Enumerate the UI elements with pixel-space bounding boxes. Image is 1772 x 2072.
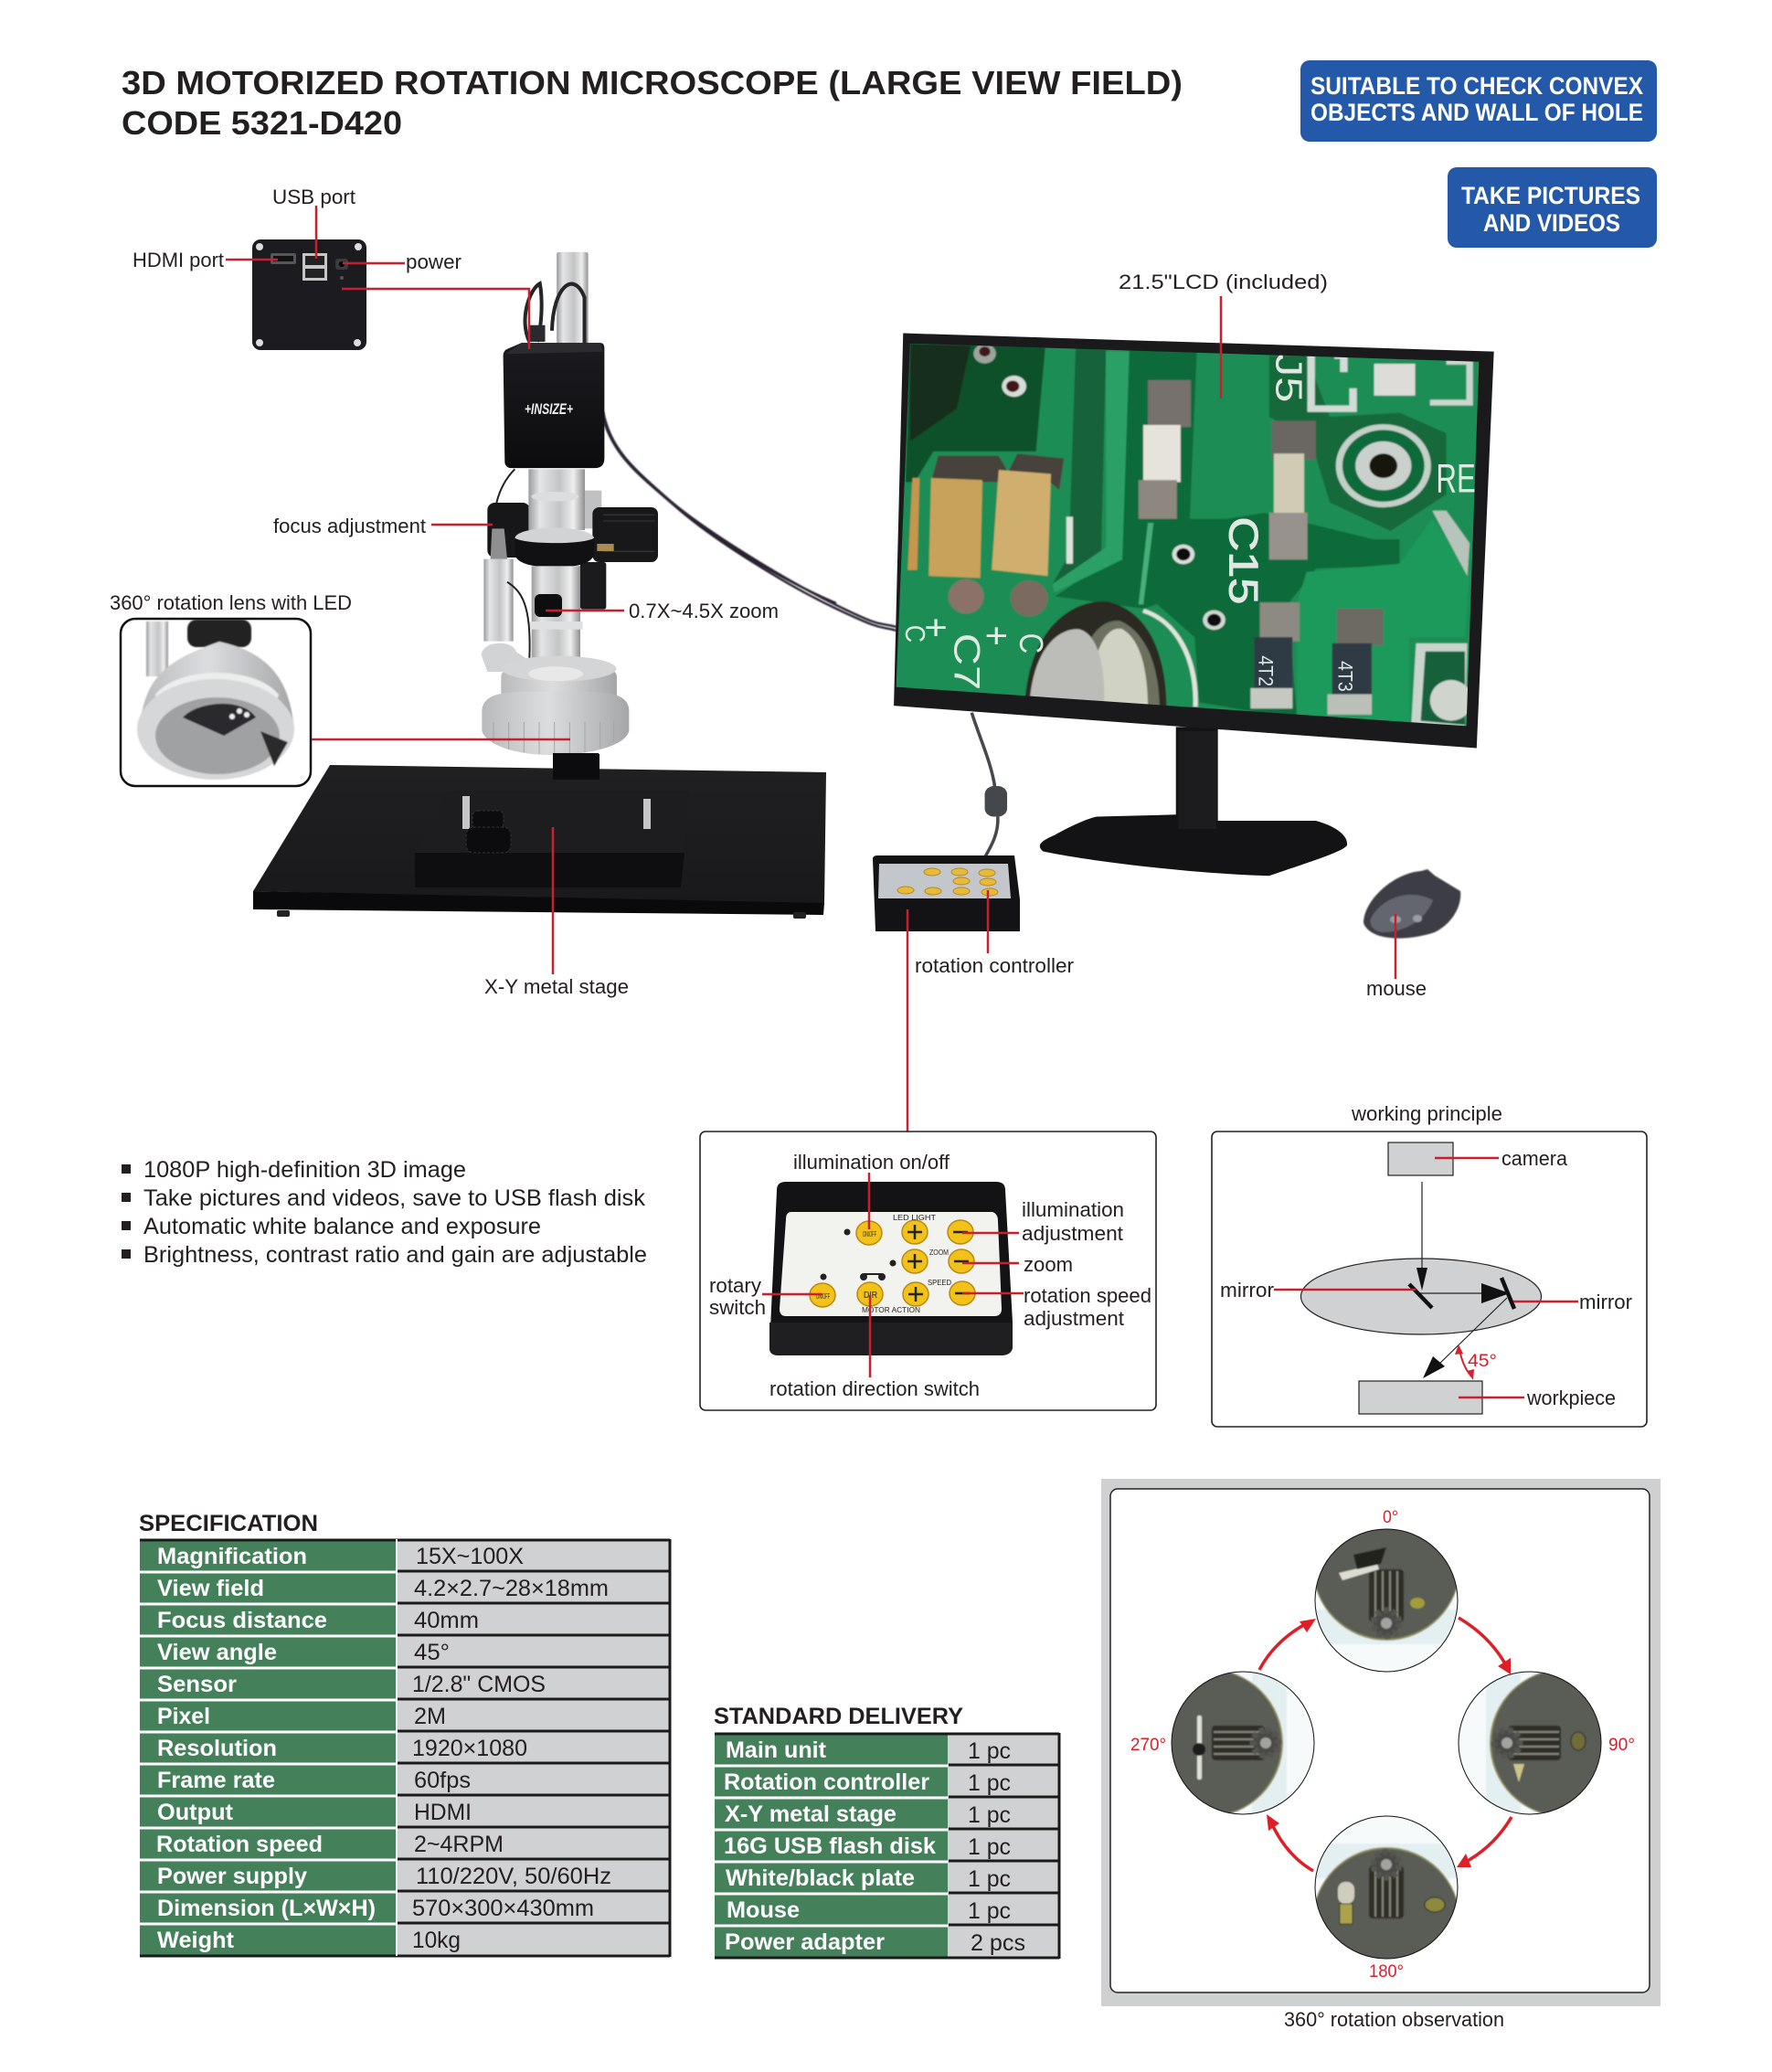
standard delivery table: 1 pc	[968, 1738, 1011, 1764]
PCB silkscreen markings: +	[924, 608, 948, 647]
label: power	[343, 250, 462, 273]
callout: right mirror: mirror	[1579, 1291, 1632, 1313]
mirrors	[1409, 1278, 1514, 1309]
controller box: SPEED	[928, 1279, 951, 1287]
specification table: Pixel	[157, 1704, 210, 1729]
panel: 360 rotation observation	[1101, 1479, 1661, 2006]
specification table	[140, 1539, 670, 1957]
electrolytic capacitor	[1143, 611, 1195, 707]
PCB silkscreen markings: 4T2	[1254, 655, 1277, 686]
specification table: 110/220V, 50/60Hz	[416, 1864, 611, 1889]
camera body	[504, 343, 604, 468]
callout: rotary switch	[709, 1274, 822, 1319]
callout: rotation direction switch: rotation direction switch	[769, 1377, 980, 1400]
label: zoom: 0.7X~4.5X zoom	[629, 600, 779, 622]
mounting ring	[1339, 427, 1427, 505]
view: 180 degrees	[1314, 1815, 1459, 1960]
label: rotation controller: rotation controller	[915, 954, 1074, 977]
specification table: HDMI	[414, 1800, 472, 1825]
cables camera to monitor	[603, 411, 897, 631]
camera brand label: +INSIZE+	[525, 400, 573, 418]
specification table: Focus distance	[157, 1608, 327, 1633]
callout: zoom	[962, 1253, 1073, 1276]
label: working principle: working principle	[1351, 1102, 1502, 1125]
standard delivery table: Power adapter	[725, 1929, 885, 1955]
focus knobs	[580, 491, 601, 528]
specification table: Resolution	[157, 1736, 277, 1761]
specification table: 60fps	[414, 1768, 471, 1793]
standard delivery table: 1 pc	[968, 1802, 1011, 1828]
standard delivery table: 1 pc	[968, 1834, 1011, 1860]
workpiece: workpiece	[1526, 1387, 1616, 1409]
standard delivery table: Main unit	[726, 1737, 827, 1763]
label: LCD: 21.5"LCD (included)	[1119, 271, 1328, 293]
view: 0 degrees	[1314, 1528, 1459, 1673]
label: X-Y metal stage: X-Y metal stage	[484, 975, 629, 998]
view: 90 degrees	[1459, 1671, 1601, 1815]
view: 270 degrees	[1172, 1671, 1314, 1815]
title: CODE 5321-D420	[122, 104, 402, 142]
callout: illumination adjustment: adjustment	[1022, 1222, 1123, 1245]
callout: right mirror	[1513, 1291, 1632, 1313]
rotation arrows	[1259, 1618, 1512, 1871]
connector leader line	[342, 289, 529, 349]
label: USB port: USB port	[272, 186, 355, 208]
callout: illumination on/off: illumination on/off	[793, 1151, 950, 1174]
PCB silkscreen markings: RE	[1436, 457, 1476, 502]
specification table: 45°	[414, 1640, 450, 1665]
callout: rotation speed adjustment	[962, 1284, 1151, 1330]
light path arrows	[1417, 1182, 1510, 1378]
specification table: Weight	[157, 1928, 235, 1953]
panel: controller detail	[700, 1132, 1156, 1410]
feature list: Take pictures and videos, save to USB flash disk	[143, 1185, 645, 1211]
inset: rotation lens	[121, 619, 311, 786]
resistors	[1260, 602, 1300, 642]
camera rear panel photo	[252, 239, 366, 350]
label: mouse	[1366, 914, 1427, 1000]
title	[122, 64, 1183, 142]
PCB silkscreen markings: C	[1012, 633, 1048, 653]
label: power: power	[406, 250, 462, 273]
leader: lens	[312, 738, 570, 740]
microscope head	[504, 252, 604, 468]
PCB silkscreen markings: J5	[1268, 354, 1310, 402]
standard delivery table: Mouse	[727, 1897, 800, 1923]
controller box: ON/OFF	[863, 1230, 876, 1238]
monitor bezel	[894, 334, 1494, 749]
specification table: Magnification	[157, 1544, 307, 1569]
angle labels	[1130, 1508, 1635, 1982]
feature list: Brightness, contrast ratio and gain are adjustable	[143, 1242, 647, 1268]
capacitors	[931, 453, 1064, 490]
monitor	[886, 334, 1494, 876]
badge: take pictures and videos	[1448, 167, 1657, 248]
specification table: Sensor	[157, 1672, 237, 1697]
specification table: View angle	[157, 1640, 277, 1665]
leader: controller to detail panel	[907, 909, 908, 1132]
objective	[553, 753, 599, 780]
zoom tube	[532, 566, 580, 669]
label: focus adjustment: focus adjustment	[273, 515, 426, 537]
specification heading: SPECIFICATION	[139, 1511, 318, 1536]
controller box: ON/OFF	[816, 1292, 830, 1301]
standard delivery table: 16G USB flash disk	[724, 1833, 936, 1859]
specification table: 2~4RPM	[414, 1832, 504, 1857]
specification table: Output	[157, 1800, 234, 1825]
callout: rotation speed adjustment: rotation speed	[1024, 1284, 1151, 1307]
standard delivery table: 1 pc	[968, 1898, 1011, 1924]
badge: take pictures and videos: TAKE PICTURES	[1461, 182, 1640, 209]
controller cable	[971, 713, 998, 857]
upper tube	[528, 469, 585, 530]
standard delivery table: X-Y metal stage	[725, 1801, 897, 1827]
angle labels: 270°	[1130, 1736, 1166, 1755]
PCB silkscreen markings: C	[898, 625, 929, 643]
lens ring	[501, 660, 617, 707]
lens ellipse	[1301, 1259, 1541, 1334]
callout: illumination adjustment: illumination	[1022, 1198, 1124, 1221]
specification table: 15X~100X	[416, 1544, 524, 1569]
side cylinder	[483, 559, 514, 642]
PCB silkscreen markings: +	[985, 616, 1008, 655]
specification table: 10kg	[412, 1928, 461, 1953]
specification table: 4.2×2.7~28×18mm	[414, 1576, 609, 1601]
standard delivery heading: STANDARD DELIVERY	[714, 1704, 963, 1729]
PCB silkscreen markings: 4T3	[1333, 661, 1355, 692]
standard delivery table: White/black plate	[726, 1865, 915, 1891]
standard delivery table: 1 pc	[968, 1770, 1011, 1796]
angle labels: 90°	[1608, 1736, 1635, 1755]
callout: rotary switch: rotary	[709, 1274, 761, 1297]
controller box: LED LIGHT	[893, 1214, 936, 1222]
feature list: Automatic white balance and exposure	[143, 1214, 541, 1239]
arrow heads	[1267, 1619, 1511, 1867]
specification table: 1/2.8" CMOS	[412, 1672, 546, 1697]
objective overlap on stage	[553, 754, 600, 780]
badge: suitable to check convex objects: OBJECTS AND WALL OF HOLE	[1310, 99, 1643, 126]
badge: suitable to check convex objects	[1300, 60, 1657, 142]
specification table: 1920×1080	[412, 1736, 527, 1761]
controller box: MOTOR ACTION	[862, 1306, 920, 1314]
45 degree angle: 45°	[1468, 1352, 1497, 1371]
callout: illumination adjustment	[962, 1198, 1124, 1245]
controller box: ZOOM	[929, 1249, 949, 1257]
vias	[1002, 376, 1026, 397]
workpiece	[1359, 1381, 1616, 1414]
panel: working principle diagram	[1212, 1132, 1647, 1427]
badge: take pictures and videos: AND VIDEOS	[1483, 209, 1620, 237]
pillar	[557, 252, 589, 349]
standard delivery table: 2 pcs	[971, 1930, 1025, 1956]
standard delivery table	[715, 1733, 1059, 1959]
collar	[515, 537, 594, 568]
controller box	[769, 1182, 1013, 1355]
specification table: 570×300×430mm	[412, 1896, 594, 1921]
specification table: Rotation speed	[156, 1832, 323, 1857]
X-Y metal stage photo	[253, 765, 826, 919]
feature list	[122, 1157, 647, 1268]
feature list: 1080P high-definition 3D image	[143, 1157, 466, 1183]
angle labels: 180°	[1369, 1962, 1404, 1982]
PCB image on screen	[886, 335, 1493, 735]
standard delivery table: Rotation controller	[724, 1769, 929, 1795]
angle labels: 0°	[1383, 1508, 1398, 1527]
specification table: Frame rate	[157, 1768, 275, 1793]
callout: rotation speed adjustment: adjustment	[1024, 1307, 1124, 1330]
specification table: Power supply	[157, 1864, 307, 1889]
title: 3D MOTORIZED ROTATION MICROSCOPE (LARGE VIEW FIELD)	[122, 64, 1183, 101]
callout: left mirror: mirror	[1220, 1279, 1274, 1302]
camera block	[1388, 1142, 1568, 1175]
microscope body	[482, 469, 658, 780]
specification table: Dimension (L×W×H)	[157, 1896, 376, 1921]
PCB silkscreen markings: C15	[1221, 516, 1267, 604]
top right pads	[1374, 364, 1415, 396]
badge: suitable to check convex objects: SUITABLE TO CHECK CONVEX	[1310, 72, 1643, 100]
specification table: 2M	[414, 1704, 446, 1729]
label: USB port	[272, 186, 355, 259]
label: mouse: mouse	[1366, 977, 1427, 1000]
PCB silkscreen markings	[898, 354, 1476, 692]
monitor stand	[1040, 727, 1347, 876]
45 degree angle	[1455, 1344, 1497, 1380]
PCB silkscreen markings: C7	[947, 633, 988, 690]
rotation controller photo	[873, 855, 1020, 931]
callout: zoom: zoom	[1024, 1253, 1073, 1276]
camera cables	[525, 283, 585, 347]
callout: rotary switch: switch	[709, 1296, 766, 1319]
caption: rotation observation: 360° rotation observation	[1284, 2008, 1504, 2031]
controller box: DIR	[864, 1291, 877, 1301]
specification table: 40mm	[414, 1608, 479, 1633]
camera block: camera	[1501, 1147, 1568, 1170]
label: HDMI port: HDMI port	[133, 249, 224, 271]
standard delivery table: 1 pc	[968, 1866, 1011, 1892]
specification table: View field	[157, 1576, 264, 1601]
mouse photo	[1363, 869, 1460, 939]
component pads	[1148, 380, 1191, 427]
label: 360 rotation lens with LED: 360° rotation lens with LED	[110, 591, 352, 614]
